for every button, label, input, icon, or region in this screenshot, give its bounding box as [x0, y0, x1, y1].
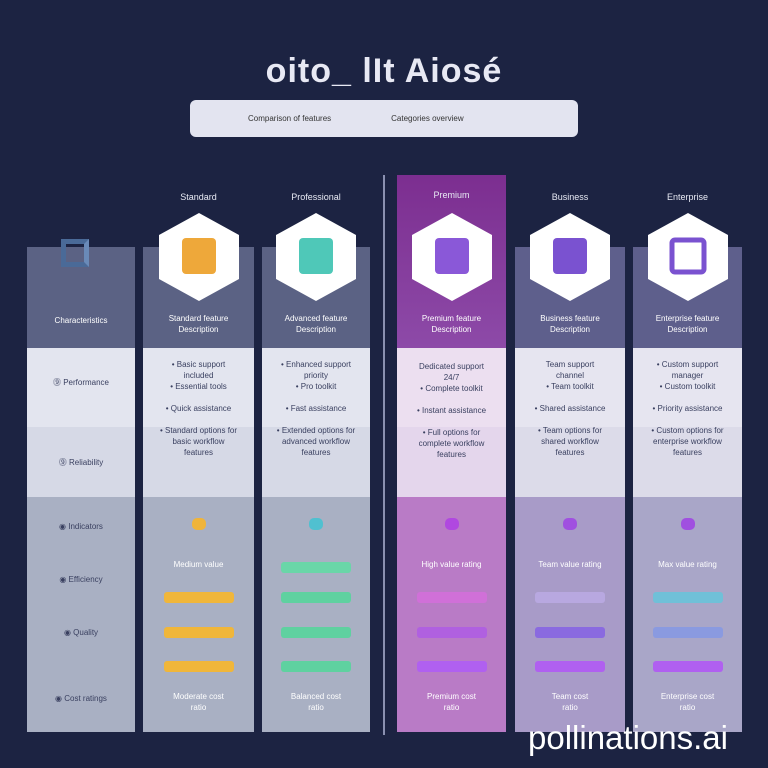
column 4: features: [556, 448, 584, 457]
title: oito_ lIt Aiosé: [266, 52, 502, 90]
column: categories: ◉ Quality: [64, 628, 98, 637]
column 3 highlighted: Description: [431, 325, 472, 334]
column 3 highlighted: • Complete toolkit: [420, 384, 483, 393]
column 3 highlighted: 24/7: [444, 373, 459, 382]
column 5: features: [673, 448, 702, 457]
column 1: basic workflow: [172, 437, 224, 446]
column: categories: ◉ Efficiency: [59, 575, 103, 584]
column 4: Team value rating: [538, 560, 602, 569]
column 4: Team support: [546, 360, 594, 369]
column 5: Max value rating: [658, 560, 717, 569]
subtitle bar: [190, 100, 578, 137]
column 3 highlighted: features: [437, 450, 466, 459]
column 1: [143, 192, 254, 732]
column 3 highlighted: High value rating: [421, 560, 482, 569]
column 4: • Team options for: [538, 426, 602, 435]
column 2: • Fast assistance: [286, 404, 346, 413]
column 1: • Basic support: [172, 360, 225, 369]
column 2: priority: [304, 371, 328, 380]
column 2: • Extended options for: [277, 426, 355, 435]
text: Professional: [291, 192, 341, 202]
column 1: Medium value: [174, 560, 223, 569]
column 1: Moderate cost: [173, 692, 224, 701]
column 3 highlighted: [397, 175, 506, 732]
column: categories: ⓽ Reliability: [59, 458, 103, 467]
column 4: Business feature: [540, 314, 600, 323]
column 3 highlighted: Premium cost: [427, 692, 476, 701]
column 4: [515, 192, 625, 732]
column 1: Description: [178, 325, 218, 334]
column 2: [262, 192, 370, 732]
icon: violet frame hex: [648, 213, 728, 301]
text: Business: [552, 192, 588, 202]
column 2: Description: [296, 325, 336, 334]
column 3 highlighted: • Full options for: [423, 428, 480, 437]
column 4: Description: [550, 325, 590, 334]
column 5: • Priority assistance: [653, 404, 722, 413]
icon: category: [61, 239, 89, 267]
column: categories: ◉ Cost ratings: [55, 694, 107, 703]
column 3 highlighted: Premium feature: [422, 314, 481, 323]
text: Enterprise: [667, 192, 708, 202]
column 4: shared workflow: [541, 437, 599, 446]
column 5: • Custom support: [657, 360, 718, 369]
text: Standard: [180, 192, 217, 202]
column 5: Enterprise feature: [656, 314, 719, 323]
icon: teal hex: [276, 213, 356, 301]
column 5: [633, 192, 742, 732]
icon: violet hex: [530, 213, 610, 301]
column 4: • Team toolkit: [546, 382, 594, 391]
column 5: Enterprise cost: [661, 692, 714, 701]
column: categories: [27, 239, 135, 732]
column 1: ratio: [191, 703, 206, 712]
row labels: ⓽ Performance: [53, 378, 109, 387]
column 3 highlighted: Dedicated support: [419, 362, 484, 371]
column 3 highlighted: ratio: [444, 703, 459, 712]
watermark: pollinations.ai: [528, 719, 728, 756]
column 4: • Shared assistance: [535, 404, 605, 413]
column 5: • Custom toolkit: [660, 382, 715, 391]
column 1: • Standard options for: [160, 426, 237, 435]
column: categories: ◉ Indicators: [59, 522, 103, 531]
column 2: ratio: [308, 703, 324, 712]
column 3 highlighted: Premium: [433, 190, 470, 200]
subtitle bar: Comparison of features Categories overview: [248, 114, 464, 123]
column 3 highlighted: • Instant assistance: [417, 406, 486, 415]
column 4: channel: [556, 371, 584, 380]
column 2: • Pro toolkit: [296, 382, 336, 391]
column 1: features: [184, 448, 213, 457]
column 1: • Essential tools: [170, 382, 227, 391]
column 5: Description: [667, 325, 708, 334]
column 2: features: [302, 448, 330, 457]
column 2: Advanced feature: [285, 314, 347, 323]
divider: [383, 175, 385, 735]
column 5: • Custom options for: [651, 426, 724, 435]
column 2: • Enhanced support: [281, 360, 351, 369]
column 1: • Quick assistance: [166, 404, 231, 413]
column 2: Balanced cost: [291, 692, 341, 701]
column 1: Standard feature: [169, 314, 228, 323]
column 5: enterprise workflow: [653, 437, 722, 446]
column 2: advanced workflow: [282, 437, 350, 446]
column 5: ratio: [680, 703, 695, 712]
column: categories: Characteristics: [55, 316, 107, 325]
icon: orange hex: [159, 213, 239, 301]
column 5: manager: [672, 371, 703, 380]
column 1: included: [184, 371, 213, 380]
column 4: ratio: [562, 703, 578, 712]
icon: purple hex: [412, 213, 492, 301]
column 4: Team cost: [552, 692, 588, 701]
column 3 highlighted: complete workflow: [419, 439, 484, 448]
